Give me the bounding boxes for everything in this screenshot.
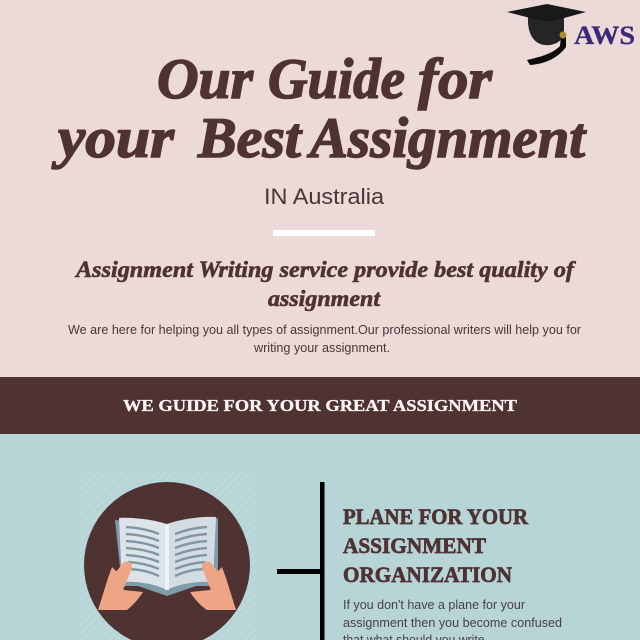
step text [343, 597, 562, 640]
divider bar [273, 230, 375, 236]
book lines [126, 527, 207, 576]
left hand [98, 567, 143, 610]
title: your [52, 107, 175, 170]
subheading: assignment [268, 286, 381, 311]
subheading: Assignment Writing service provide best quality of [74, 257, 576, 282]
step heading: PLANE FOR YOUR [343, 504, 529, 529]
subtitle: IN Australia [264, 184, 385, 209]
step text: assignment then you become confused [343, 615, 562, 630]
logo: AWS graduation cap [507, 4, 635, 65]
title: Best [197, 107, 303, 170]
step text: If you don't have a plane for your [343, 597, 526, 612]
step heading: ASSIGNMENT [343, 533, 486, 558]
title: Assignment [307, 107, 587, 170]
panel: step section background [0, 434, 640, 640]
intro paragraph: writing your assignment. [253, 340, 390, 355]
intro paragraph: We are here for helping you all types of assignment.Our professional writers will help you for [68, 322, 582, 337]
logo text: AWS [574, 21, 635, 50]
icon: graduation cap [507, 4, 586, 65]
book [115, 518, 218, 596]
banner heading: WE GUIDE FOR YOUR GREAT ASSIGNMENT [123, 396, 518, 415]
intro paragraph [68, 322, 582, 355]
title: for [418, 48, 493, 111]
icon: hands holding open book [78, 472, 258, 640]
panel: header background [0, 0, 640, 377]
subheading [74, 257, 576, 311]
step heading [343, 504, 529, 587]
title [52, 48, 587, 170]
right thumb [202, 561, 220, 588]
banner [0, 377, 640, 434]
right hand [190, 567, 236, 610]
left thumb [114, 561, 132, 588]
connector: timeline [277, 482, 324, 640]
title: Guide [268, 48, 405, 111]
step heading: ORGANIZATION [343, 562, 512, 587]
title: Our [157, 48, 254, 111]
